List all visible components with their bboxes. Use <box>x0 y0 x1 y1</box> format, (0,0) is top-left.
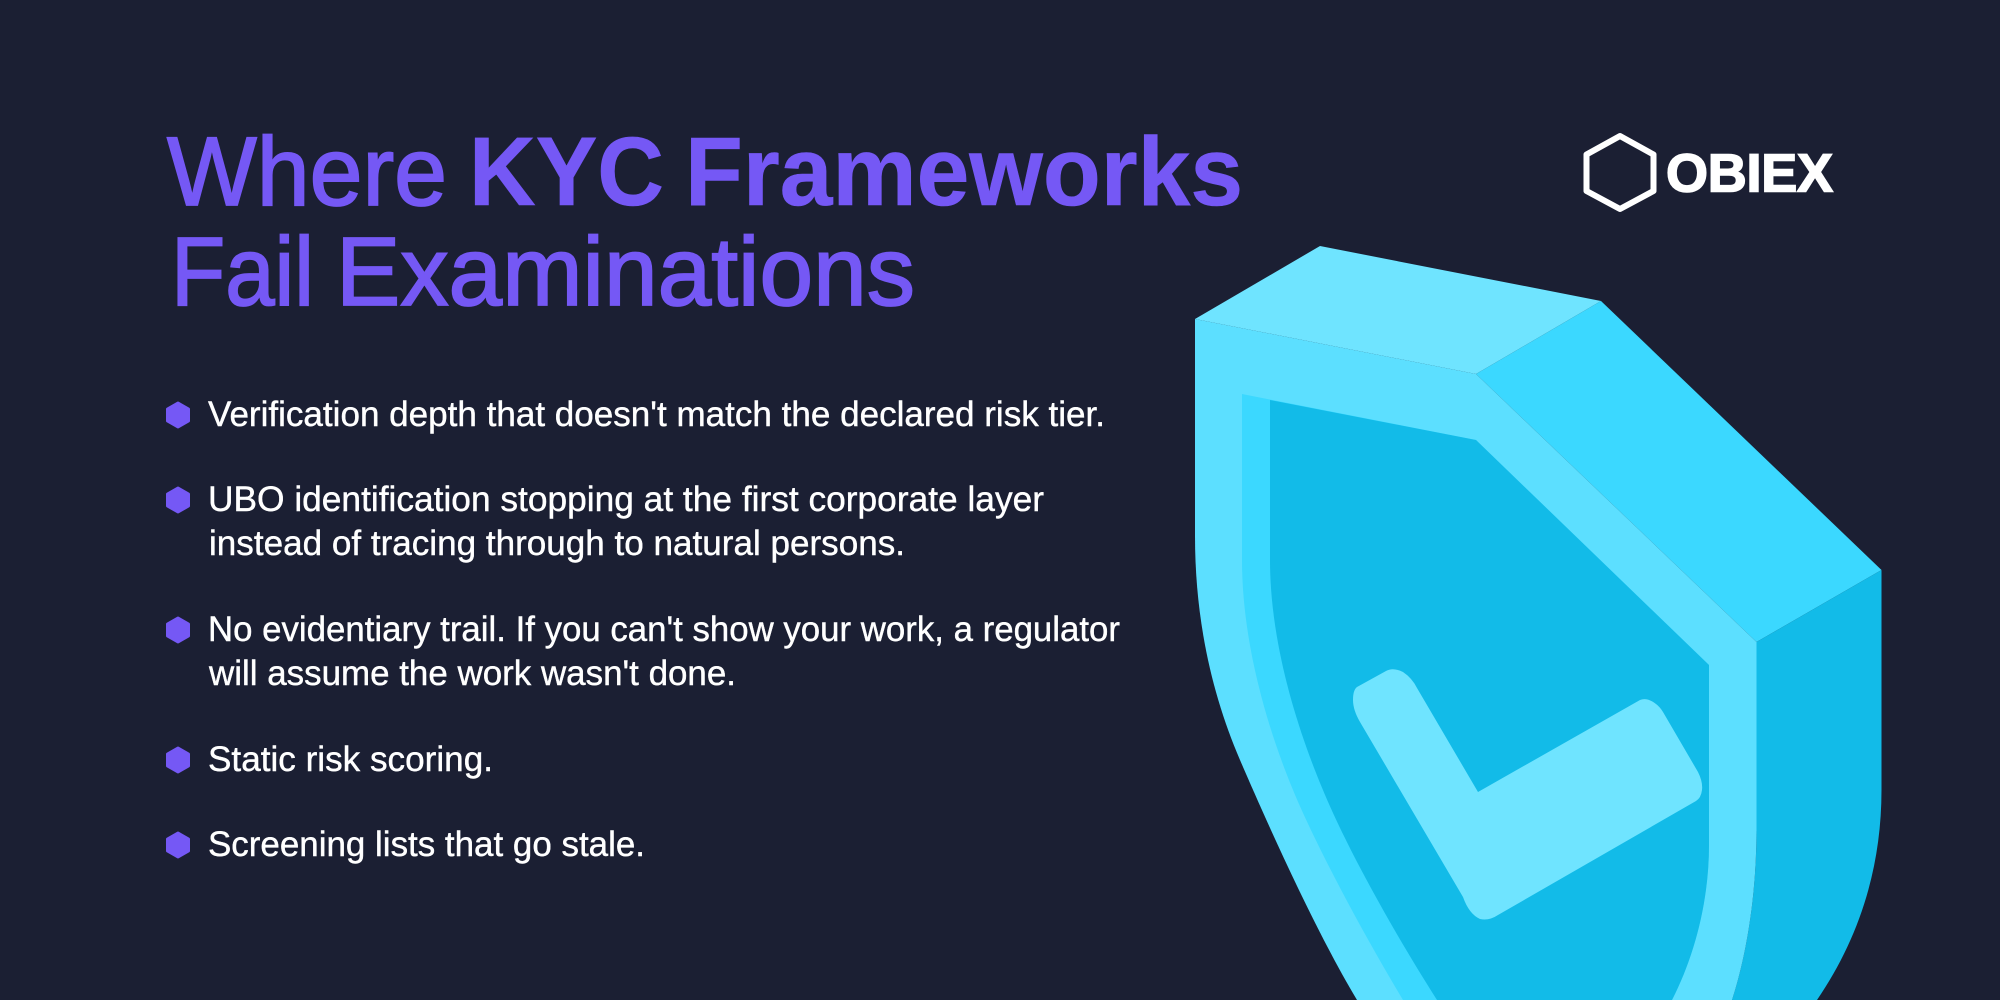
bullet 5: Screening lists that go stale. <box>208 824 645 864</box>
shield top face <box>1195 246 1601 374</box>
logo wordmark: OBIEX <box>1666 144 1833 204</box>
bullet 3: No evidentiary trail. If you can't show your work, a regulator <box>208 609 1120 649</box>
illustration: isometric shield with checkmark <box>1195 246 1882 1000</box>
title: Where <box>167 117 447 226</box>
shield upper right face <box>1476 301 1882 642</box>
bullet 3 <box>168 609 1120 693</box>
icon: hexagon outline <box>1586 136 1654 209</box>
bullet 2 <box>168 479 1044 563</box>
bullet 2: UBO identification stopping at the first corporate layer <box>208 479 1044 519</box>
bullet list <box>168 394 1120 864</box>
bullet 3: will assume the work wasn't done. <box>208 653 736 693</box>
title: KYC <box>469 117 664 226</box>
bullet 4: Static risk scoring. <box>208 739 493 779</box>
checkmark <box>1353 669 1702 920</box>
bullet 2: instead of tracing through to natural persons. <box>209 523 905 563</box>
title: Frameworks <box>685 117 1243 226</box>
title: Examinations <box>336 217 915 326</box>
shield inner bevel <box>1242 394 1709 1000</box>
logo: Obiex <box>1586 136 1833 209</box>
bullet 1: Verification depth that doesn't match the declared risk tier. <box>208 394 1105 434</box>
shield front frame <box>1195 319 1756 1000</box>
title: Fail <box>171 217 314 326</box>
shield right side face <box>1732 570 1882 1000</box>
title <box>167 117 1243 326</box>
shield inner face <box>1270 400 1709 1000</box>
